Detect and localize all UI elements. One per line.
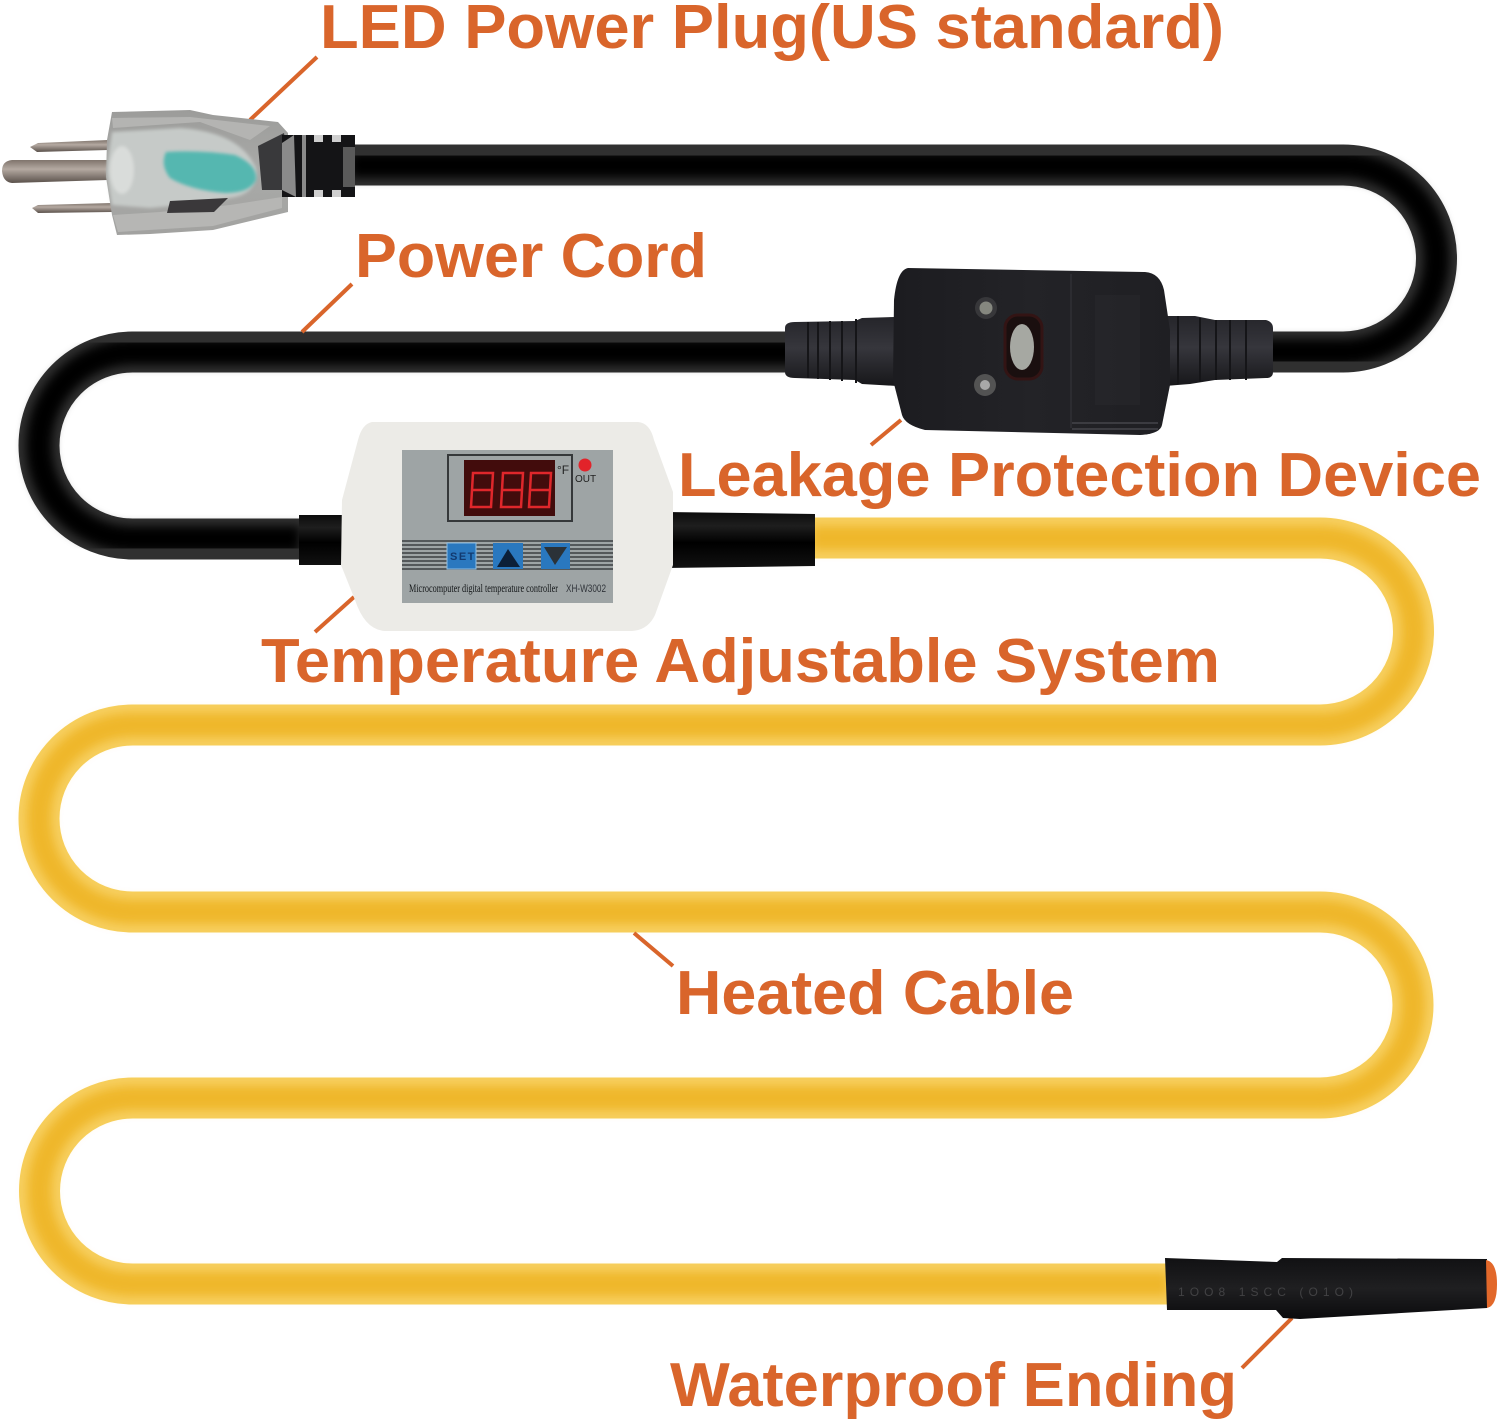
test button — [1005, 315, 1042, 379]
label: heated cable: Heated Cable — [676, 959, 1074, 1028]
controller caption: Microcomputer digital temperature controller — [409, 581, 558, 595]
label: temperature adjustable system: Temperature Adjustable System — [261, 627, 1220, 696]
OUT indicator: OUT — [575, 474, 596, 485]
temperature sleeves — [299, 512, 815, 568]
SET button — [447, 543, 476, 569]
sleeve print: 1OO8 1SCC (O1O) — [1178, 1285, 1353, 1299]
red LED display — [464, 460, 555, 516]
green LED — [164, 151, 256, 193]
power cord — [39, 165, 1437, 539]
right strain relief — [1165, 316, 1273, 386]
device housing — [893, 268, 1170, 435]
label: waterproof ending: Waterproof Ending — [670, 1351, 1237, 1420]
SET button: SET — [450, 551, 476, 563]
stripe band — [402, 541, 613, 569]
icon: LED power plug — [2, 110, 355, 235]
unit label: °F — [557, 463, 569, 477]
icon: temperature controller — [341, 422, 673, 631]
icon: leakage protection device — [785, 268, 1273, 435]
left strain relief — [785, 317, 897, 386]
model number: XH-W3002 — [566, 583, 606, 595]
label: power cord: Power Cord — [355, 222, 707, 291]
indicator lamp — [975, 297, 997, 319]
down button — [541, 543, 570, 569]
leader lines — [250, 57, 1292, 1368]
plug ribbed strain relief — [282, 135, 355, 197]
heated cable — [39, 538, 1414, 1284]
plug pins — [2, 140, 112, 213]
up button — [493, 543, 523, 569]
controller faceplate — [402, 450, 613, 603]
OUT indicator — [575, 458, 596, 485]
label: leakage protection device: Leakage Protection Device — [678, 441, 1481, 510]
plug clear body — [106, 110, 288, 235]
controller housing — [341, 422, 673, 631]
icon: waterproof ending — [1165, 1258, 1497, 1319]
reset screw — [974, 374, 996, 396]
display frame — [448, 455, 572, 521]
